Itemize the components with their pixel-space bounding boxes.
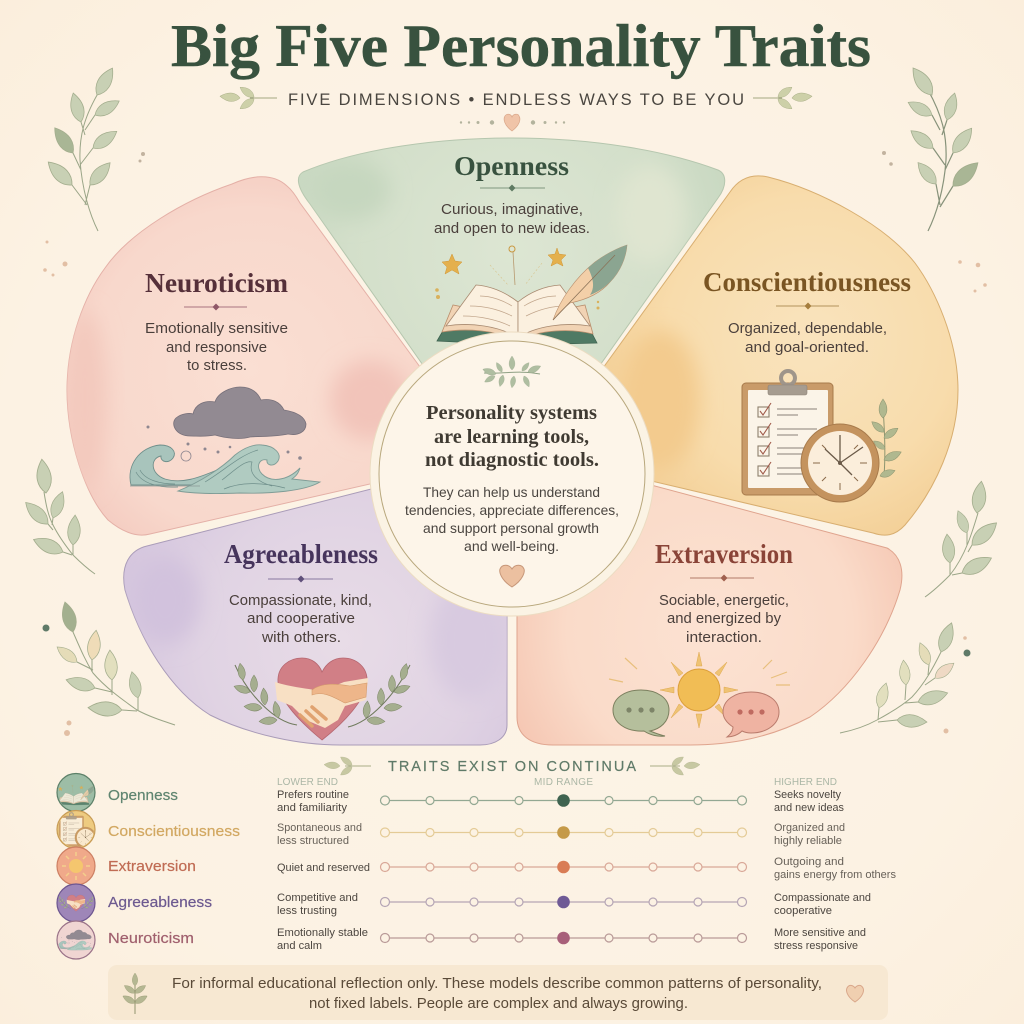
higher end text: extraversion: gains energy from others (774, 869, 897, 881)
icon: center heart (500, 565, 524, 587)
legend: agreeableness (57, 884, 212, 922)
higher end text: conscientiousness (774, 822, 845, 847)
footer text: not fixed labels. People are complex and always growing. (309, 995, 688, 1012)
description: neuroticism: Emotionally sensitive (145, 321, 288, 337)
footer text: For informal educational reflection only. These models describe common patterns of personality, (172, 975, 822, 992)
center circle: key message (370, 332, 654, 616)
higher end text: openness: and new ideas (774, 802, 844, 814)
higher end text: neuroticism (774, 927, 866, 952)
legend: conscientiousness: Conscientiousness (108, 823, 240, 840)
panel: extraversion (517, 482, 902, 745)
higher end text: openness (774, 789, 844, 814)
slider: neuroticism (380, 932, 746, 944)
divider: neuroticism (184, 304, 247, 310)
icon: sun and speech bubbles (609, 652, 790, 737)
divider: conscientiousness (776, 302, 839, 310)
decorative branch: bottom right (840, 621, 958, 733)
description: neuroticism: and responsive (166, 340, 267, 356)
heading: conscientiousness: Conscientiousness (703, 267, 911, 297)
center description: and support personal growth (423, 520, 599, 536)
icon: footer heart (847, 985, 863, 1002)
panel: agreeableness (124, 488, 510, 745)
lower end text: openness: Prefers routine (277, 789, 349, 801)
slider: agreeableness (380, 896, 746, 908)
decorative branch: middle left (21, 458, 95, 574)
slider: openness (380, 794, 746, 807)
description: agreeableness: and cooperative (247, 611, 355, 627)
center heading (425, 402, 599, 471)
description: openness: and open to new ideas. (434, 221, 590, 237)
center heading: Personality systems (426, 402, 597, 424)
icon: continua sprig left (324, 755, 371, 777)
icon: center sprig (482, 356, 542, 388)
panel: neuroticism (63, 177, 420, 535)
icon: subtitle sprig right (753, 84, 812, 112)
decorative branch: middle right (925, 480, 1001, 597)
description: neuroticism (145, 321, 288, 374)
higher end text: agreeableness (774, 892, 871, 917)
higher end text: extraversion (774, 856, 897, 881)
description: openness (434, 202, 590, 237)
higher end text: extraversion: Outgoing and (774, 856, 844, 868)
subtitle: FIVE DIMENSIONS • ENDLESS WAYS TO BE YOU (288, 91, 744, 109)
legend: agreeableness: Agreeableness (108, 894, 212, 911)
icon: footer sprig (121, 973, 149, 1014)
scale labels: LOWER END (277, 777, 338, 788)
divider: openness (480, 184, 545, 192)
continuum row: agreeableness (277, 892, 871, 917)
divider: agreeableness (268, 576, 333, 582)
description: neuroticism: to stress. (187, 358, 247, 374)
lower end text: conscientiousness: less structured (277, 835, 349, 847)
description: conscientiousness (728, 321, 887, 356)
lower end text: agreeableness (277, 892, 358, 917)
description: agreeableness: Compassionate, kind, (229, 593, 372, 609)
center description: They can help us understand (423, 484, 600, 500)
legend: openness (57, 774, 178, 812)
higher end text: conscientiousness: highly reliable (774, 835, 842, 847)
decorative branch: bottom left (54, 600, 175, 725)
icon: subtitle sprig left (220, 84, 277, 112)
heading: agreeableness: Agreeableness (224, 539, 378, 569)
description: conscientiousness: Organized, dependable, (728, 321, 887, 337)
title: Big Five Personality Traits (171, 13, 871, 79)
scale labels: MID RANGE (534, 777, 593, 788)
footer text (172, 975, 822, 1012)
icon: heart and handshake with laurels (233, 658, 411, 740)
icon: storm cloud and waves (130, 387, 320, 494)
footer note (108, 965, 888, 1020)
continuum row: neuroticism (277, 927, 866, 952)
higher end text: agreeableness: Compassionate and (774, 892, 871, 904)
higher end text: openness: Seeks novelty (774, 789, 841, 801)
continuum row: conscientiousness (277, 822, 845, 847)
continuum row: extraversion (277, 856, 897, 881)
center description: tendencies, appreciate differences, (405, 502, 619, 518)
description: extraversion: and energized by (667, 611, 782, 627)
icon: continua sprig right (650, 755, 700, 777)
higher end text: agreeableness: cooperative (774, 905, 832, 917)
legend: neuroticism: Neuroticism (108, 930, 194, 947)
heading: neuroticism: Neuroticism (145, 268, 289, 298)
lower end text: neuroticism: and calm (277, 940, 322, 952)
lower end text: conscientiousness (277, 822, 362, 847)
lower end text: openness (277, 789, 349, 814)
higher end text: neuroticism: More sensitive and (774, 927, 866, 939)
description: conscientiousness: and goal-oriented. (745, 340, 869, 356)
center description: and well-being. (464, 538, 559, 554)
panel: openness (298, 138, 725, 368)
higher end text: conscientiousness: Organized and (774, 822, 845, 834)
continua heading (324, 755, 700, 777)
continua heading: TRAITS EXIST ON CONTINUA (388, 759, 636, 775)
higher end text: neuroticism: stress responsive (774, 940, 858, 952)
lower end text: openness: and familiarity (277, 802, 348, 814)
lower end text: extraversion: Quiet and reserved (277, 862, 370, 874)
center description (405, 484, 619, 554)
icon: title heart with dots (460, 114, 565, 131)
legend: conscientiousness (57, 810, 240, 848)
lower end text: agreeableness: Competitive and (277, 892, 358, 904)
center heading: not diagnostic tools. (425, 449, 599, 471)
description: agreeableness (229, 593, 372, 646)
panel: conscientiousness (603, 176, 958, 535)
scale labels (277, 777, 837, 788)
lower end text: neuroticism (277, 927, 368, 952)
description: extraversion (659, 593, 789, 646)
divider: extraversion (690, 574, 754, 582)
description: extraversion: Sociable, energetic, (659, 593, 789, 609)
slider: conscientiousness (380, 826, 746, 839)
center heading: are learning tools, (434, 426, 589, 448)
decorative branch: top left (43, 65, 122, 231)
decorative branch: top right (906, 64, 983, 231)
description: extraversion: interaction. (686, 630, 762, 646)
lower end text: conscientiousness: Spontaneous and (277, 822, 362, 834)
lower end text: agreeableness: less trusting (277, 905, 337, 917)
continuum row: openness (277, 789, 844, 814)
lower end text: neuroticism: Emotionally stable (277, 927, 368, 939)
decorative dots (42, 151, 987, 736)
heading: openness: Openness (454, 151, 569, 181)
legend: openness: Openness (108, 787, 178, 804)
heading: extraversion: Extraversion (655, 539, 793, 569)
legend: extraversion: Extraversion (108, 858, 196, 875)
slider: extraversion (380, 861, 746, 873)
icon: clipboard and clock (742, 371, 903, 502)
scale labels: HIGHER END (774, 777, 837, 788)
legend: neuroticism (57, 921, 194, 959)
description: agreeableness: with others. (261, 630, 341, 646)
icon: open book with quill and stars (435, 245, 627, 345)
legend: extraversion (57, 847, 196, 885)
description: openness: Curious, imaginative, (441, 202, 583, 218)
